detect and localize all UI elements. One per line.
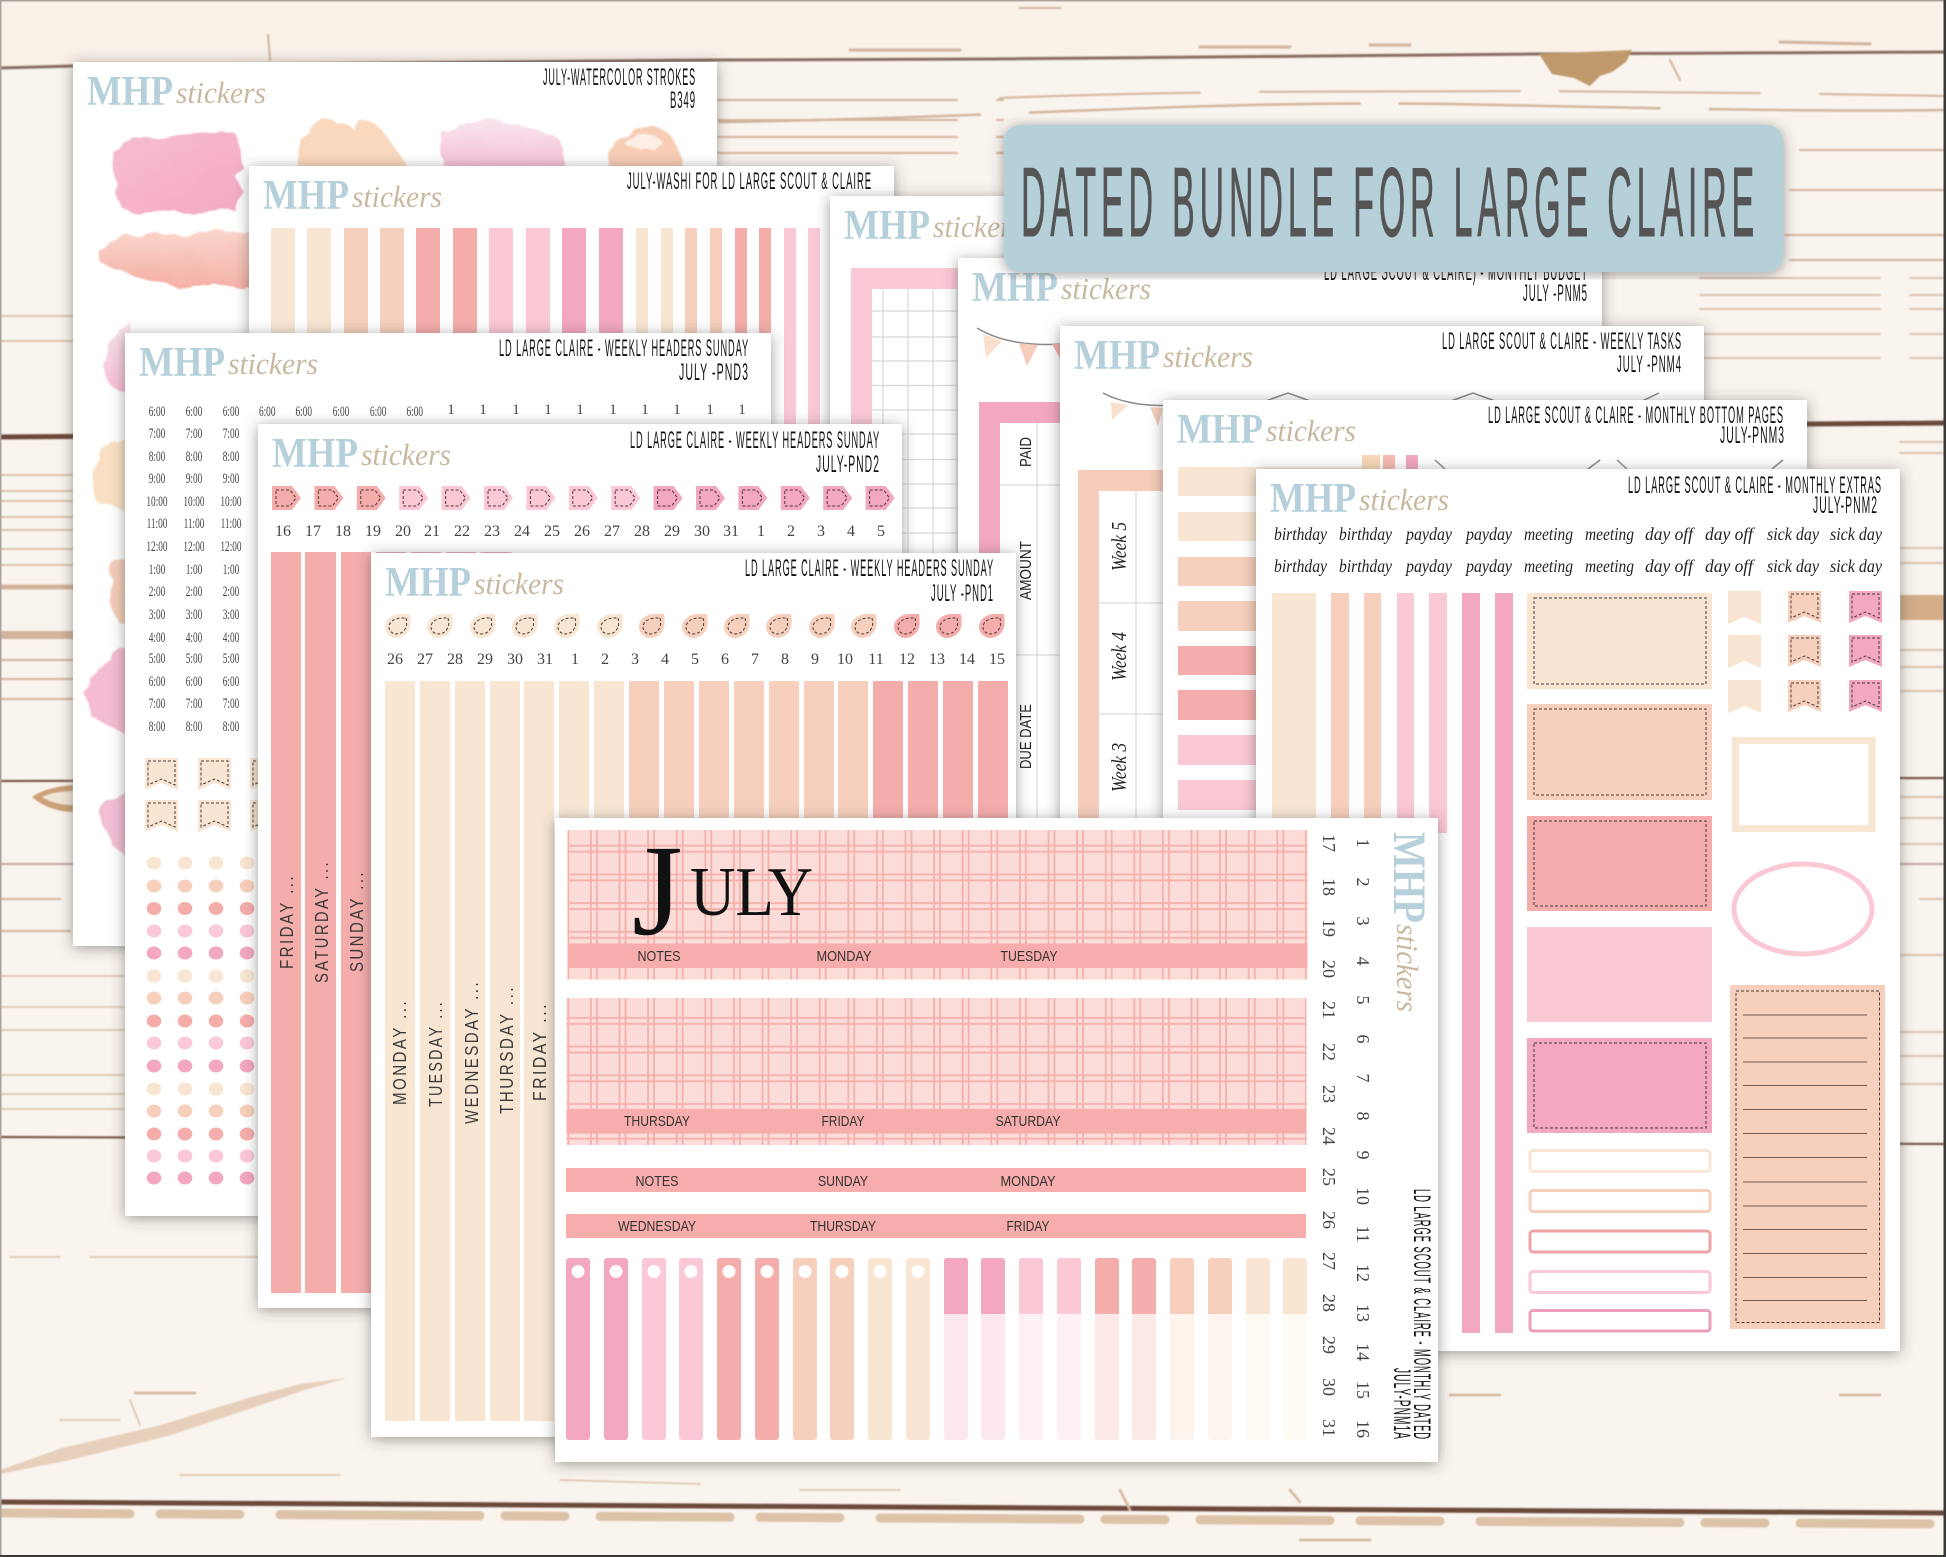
time labels: 1 (641, 402, 649, 418)
sheet title (1628, 472, 1882, 519)
date numbers: 17 (305, 523, 321, 540)
time labels: 8:00 (223, 448, 239, 465)
date numbers: 29 (664, 523, 680, 540)
time labels: 3:00 (149, 606, 165, 623)
sheet title (1442, 328, 1682, 378)
date numbers: 4 (847, 523, 855, 540)
sheet: monthly extras (1256, 469, 1900, 1351)
script words: birthday (1274, 524, 1327, 544)
time labels: 6:00 (149, 403, 165, 420)
text: LD LARGE CLAIRE - WEEKLY HEADERS SUNDAY (630, 427, 880, 454)
script words: day off (1705, 556, 1756, 576)
date numbers: 6 (721, 651, 729, 668)
vertical washi strips (1272, 593, 1513, 1333)
time labels: 12:00 (220, 538, 242, 555)
second plaid panel (566, 998, 1306, 1145)
coral header strips: SUNDAY ... (347, 870, 367, 972)
coral header strips (271, 552, 511, 1293)
time labels: 9:00 (223, 470, 239, 487)
date numbers: 5 (877, 523, 885, 540)
rotated date column 1-16 (1353, 838, 1373, 1438)
script words: birthday (1274, 556, 1327, 576)
time labels: 7:00 (186, 425, 202, 442)
date numbers: 21 (424, 523, 440, 540)
time labels: 7:00 (223, 695, 239, 712)
time labels: 12:00 (146, 538, 168, 555)
logo (272, 431, 451, 477)
date numbers: 20 (395, 523, 411, 540)
notes band (566, 1168, 1306, 1192)
date numbers: 2 (601, 651, 609, 668)
time labels: 1:00 (223, 561, 239, 578)
budget table: AMOUNT (1018, 541, 1035, 600)
text: LD LARGE CLAIRE - WEEKLY HEADERS SUNDAY (499, 335, 749, 362)
time labels: 7:00 (186, 695, 202, 712)
rotated date column 1-16: 15 (1353, 1381, 1373, 1399)
date numbers: 30 (507, 651, 523, 668)
oval frame (1734, 864, 1872, 954)
time labels: 2:00 (149, 583, 165, 600)
budget table (979, 402, 1200, 1142)
header strips: FRIDAY ... (530, 1002, 550, 1101)
rotated date column 1-16: 12 (1353, 1264, 1373, 1282)
date numbers: 31 (537, 651, 553, 668)
logo: MHP (844, 203, 930, 249)
rotated date column 1-16: 7 (1353, 1074, 1373, 1082)
time labels: 5:00 (186, 650, 202, 667)
time labels: 4:00 (186, 629, 202, 646)
sheet: monthly bottom pages (1163, 400, 1807, 1284)
logo (87, 69, 266, 115)
rotated sheet title (1388, 1189, 1435, 1440)
rotated logo (1383, 832, 1435, 1012)
script words: sick day (1767, 524, 1819, 544)
sheet: weekly headers PND2 (258, 424, 902, 1308)
time labels: 7:00 (149, 695, 165, 712)
date numbers: 2 (787, 523, 795, 540)
date numbers: 1 (757, 523, 765, 540)
script words: payday (1404, 524, 1452, 544)
time labels: 2:00 (223, 583, 239, 600)
time labels: 12:00 (183, 538, 205, 555)
date numbers: 22 (454, 523, 470, 540)
logo (263, 173, 442, 219)
script words: payday (1464, 524, 1512, 544)
date numbers: 7 (751, 651, 759, 668)
logo: stickers (1359, 482, 1449, 517)
time labels: 6:00 (149, 673, 165, 690)
rotated date column 1-16: 8 (1353, 1112, 1373, 1120)
sheet: washi (249, 166, 894, 1050)
time labels: 8:00 (186, 448, 202, 465)
script words: day off (1645, 556, 1696, 576)
rotated date column 17-31: 23 (1319, 1085, 1339, 1103)
tag stickers (272, 486, 895, 510)
rotated date column 17-31: 21 (1319, 1001, 1339, 1019)
watercolor swatches (84, 120, 682, 860)
sheet title (630, 427, 880, 478)
date numbers (387, 651, 1005, 668)
sheet: weekly tasks (1060, 326, 1704, 1210)
time labels: 8:00 (223, 718, 239, 735)
date numbers: 12 (899, 651, 915, 668)
time labels: 6:00 (370, 403, 386, 420)
header strips (385, 681, 1008, 1421)
rotated date column 1-16: 5 (1353, 996, 1373, 1004)
plaid panel with July title (568, 819, 1308, 980)
logo: stickers (361, 437, 451, 472)
week table (1078, 470, 1300, 1210)
time labels: 1 (609, 402, 617, 418)
script words: sick day (1830, 524, 1882, 544)
time labels: 8:00 (149, 718, 165, 735)
time labels: 6:00 (333, 403, 349, 420)
date numbers: 13 (929, 651, 945, 668)
logo: MHP (263, 173, 349, 219)
rotated date column 1-16: 4 (1353, 956, 1373, 966)
sheet: weekly headers PND3: JULY -PND3 (679, 359, 749, 386)
rotated date column 1-16: 9 (1353, 1150, 1373, 1160)
script words: meeting (1585, 556, 1634, 576)
time labels: 1 (479, 402, 487, 418)
date numbers: 28 (447, 651, 463, 668)
month title: J (632, 819, 683, 963)
sheet: weekly headers PND1 (371, 553, 1016, 1437)
date numbers: 29 (477, 651, 493, 668)
rotated date column 17-31: 18 (1319, 878, 1339, 896)
logo: MHP (972, 265, 1058, 311)
time labels (146, 402, 746, 735)
text: JULY -PNM5 (1523, 280, 1588, 307)
logo: stickers (1163, 339, 1253, 374)
sheet title (1324, 259, 1588, 307)
date numbers: 27 (604, 523, 620, 540)
date numbers: 28 (634, 523, 650, 540)
time labels: 3:00 (186, 606, 202, 623)
script words: meeting (1524, 524, 1573, 544)
date numbers: 23 (484, 523, 500, 540)
date numbers: 25 (544, 523, 560, 540)
budget table: DUE DATE (1018, 704, 1035, 769)
logo (1270, 476, 1449, 522)
rotated date column 1-16: 1 (1353, 838, 1373, 848)
time labels: 6:00 (223, 403, 239, 420)
date numbers: 18 (335, 523, 351, 540)
sheet title (745, 555, 994, 607)
header strips: TUESDAY ... (426, 1000, 446, 1107)
date numbers: 26 (387, 651, 403, 668)
second plaid panel: SATURDAY (996, 1113, 1060, 1130)
washi stripes (271, 228, 820, 1028)
sheet title (1488, 402, 1785, 449)
script words: meeting (1524, 556, 1573, 576)
time labels: 6:00 (407, 403, 423, 420)
date numbers: 9 (811, 651, 819, 668)
logo (972, 265, 1151, 311)
rotated logo: MHP (1383, 832, 1435, 923)
time labels: 10:00 (146, 493, 168, 510)
time labels: 1:00 (149, 561, 165, 578)
logo: MHP (272, 431, 358, 477)
rotated date column 1-16: 11 (1353, 1225, 1373, 1243)
date numbers: 11 (868, 651, 884, 668)
script words: day off (1705, 524, 1756, 544)
header strips: THURSDAY ... (497, 985, 517, 1114)
rotated date column 17-31: 19 (1319, 919, 1339, 937)
logo: stickers (1266, 413, 1356, 448)
time labels: 10:00 (183, 493, 205, 510)
slim outlined labels (1530, 1150, 1710, 1331)
sheet: monthly bottom pages: JULY-PNM3 (1720, 422, 1785, 449)
time labels: 8:00 (149, 448, 165, 465)
sheet: weekly headers PND1: JULY -PND1 (931, 580, 994, 607)
header strips: WEDNESDAY ... (462, 980, 482, 1124)
sheet: grid page (830, 196, 1474, 1080)
time labels: 6:00 (186, 403, 202, 420)
date numbers: 4 (661, 651, 669, 668)
script words: birthday (1339, 524, 1392, 544)
sheet: monthly dated PNM1A (555, 818, 1438, 1462)
time labels: 1 (512, 402, 520, 418)
weekday band: THURSDAY (810, 1218, 876, 1235)
time labels: 10:00 (220, 493, 242, 510)
logo: MHP (1270, 476, 1356, 522)
bunting (1103, 393, 1659, 426)
drop stickers (385, 614, 1005, 638)
coral header strips: FRIDAY ... (277, 874, 297, 969)
week table: Week 5 (1107, 522, 1131, 571)
second plaid panel: THURSDAY (624, 1113, 690, 1130)
box stickers (1527, 593, 1712, 1133)
weekday band: WEDNESDAY (618, 1218, 696, 1235)
flag stickers (1728, 591, 1882, 713)
date numbers: 27 (417, 651, 433, 668)
rotated date column 17-31: 22 (1319, 1043, 1339, 1061)
rotated date column 1-16: 3 (1353, 916, 1373, 926)
rotated date column 17-31: 20 (1319, 960, 1339, 978)
weekday band: FRIDAY (1006, 1218, 1050, 1235)
time labels: 7:00 (223, 425, 239, 442)
rotated date column 17-31: 27 (1319, 1252, 1339, 1270)
notes band: NOTES (636, 1173, 678, 1190)
date numbers: 15 (989, 651, 1005, 668)
script words: day off (1645, 524, 1696, 544)
lined notes panel (1730, 985, 1885, 1329)
script words: payday (1404, 556, 1452, 576)
logo (1074, 333, 1253, 379)
time labels: 2:00 (186, 583, 202, 600)
sheet title (543, 64, 696, 114)
sheet: watercolor strokes (73, 62, 717, 946)
date numbers: 1 (571, 651, 579, 668)
sheet: weekly headers PND2: JULY-PND2 (816, 451, 880, 478)
sheet: monthly budget (958, 258, 1602, 1142)
rotated date column 17-31: 29 (1319, 1336, 1339, 1354)
logo: MHP (87, 69, 173, 115)
time labels: 1 (576, 402, 584, 418)
script words: birthday (1339, 556, 1392, 576)
rotated date column 1-16: 14 (1353, 1343, 1373, 1361)
date numbers: 30 (694, 523, 710, 540)
logo (844, 203, 1023, 249)
rotated date column 17-31 (1319, 834, 1339, 1437)
date numbers: 14 (959, 651, 975, 668)
time labels: 4:00 (223, 629, 239, 646)
rotated date column 1-16: 2 (1353, 878, 1373, 886)
date numbers: 3 (631, 651, 639, 668)
date numbers: 3 (817, 523, 825, 540)
time labels: 11:00 (221, 515, 241, 532)
script words: sick day (1767, 556, 1819, 576)
date numbers: 5 (691, 651, 699, 668)
sheet title (499, 335, 749, 386)
time labels: 4:00 (149, 629, 165, 646)
time labels: 1 (447, 402, 455, 418)
tab strips (566, 1258, 1307, 1440)
month title (632, 819, 813, 963)
logo: stickers (933, 209, 1023, 244)
script words (1274, 524, 1882, 576)
rotated date column 17-31: 25 (1319, 1168, 1339, 1186)
time labels: 5:00 (223, 650, 239, 667)
logo: MHP (1177, 407, 1263, 453)
time labels: 1 (706, 402, 714, 418)
text: JULY-WASHI FOR LD LARGE SCOUT & CLAIRE (627, 168, 872, 195)
rotated date column 17-31: 24 (1319, 1127, 1339, 1145)
script words: meeting (1585, 524, 1634, 544)
logo: stickers (1061, 271, 1151, 306)
time labels: 7:00 (149, 425, 165, 442)
rotated date column 1-16: 16 (1353, 1420, 1373, 1438)
logo: MHP (385, 560, 471, 606)
time labels: 1:00 (186, 561, 202, 578)
notes band: SUNDAY (818, 1173, 868, 1190)
date numbers (275, 523, 885, 540)
date numbers: 24 (514, 523, 530, 540)
date numbers: 26 (574, 523, 590, 540)
date numbers: 10 (837, 651, 853, 668)
pink grid frame (851, 268, 1200, 1080)
rotated date column 1-16: 10 (1353, 1187, 1373, 1205)
rotated date column 17-31: 26 (1319, 1211, 1339, 1229)
dot stickers (147, 856, 254, 1184)
logo: stickers (176, 75, 266, 110)
script words: sick day (1830, 556, 1882, 576)
rectangle frame (1736, 740, 1872, 828)
month title: ULY (690, 854, 813, 931)
budget table: PAID (1018, 437, 1035, 467)
time labels: 5:00 (149, 650, 165, 667)
flag stickers (145, 758, 283, 832)
week table: Week 4 (1107, 632, 1131, 681)
time labels: 1 (544, 402, 552, 418)
time labels: 6:00 (186, 673, 202, 690)
sheet: weekly tasks: JULY -PNM4 (1617, 351, 1682, 378)
coral header strips: SATURDAY ... (312, 860, 332, 983)
logo: stickers (228, 346, 318, 381)
date numbers: 8 (781, 651, 789, 668)
rotated date column 17-31: 30 (1319, 1378, 1339, 1396)
sheet: monthly dated PNM1A: JULY-PNM1A (1388, 1368, 1415, 1440)
time labels: 8:00 (186, 718, 202, 735)
time labels: 3:00 (223, 606, 239, 623)
time labels: 1 (738, 402, 746, 418)
time labels: 1 (673, 402, 681, 418)
script words: payday (1464, 556, 1512, 576)
title banner (1004, 125, 1783, 272)
date numbers: 19 (365, 523, 381, 540)
time labels: 11:00 (184, 515, 204, 532)
time labels: 9:00 (149, 470, 165, 487)
date numbers: 31 (723, 523, 739, 540)
logo: stickers (352, 179, 442, 214)
text: LD LARGE CLAIRE - WEEKLY HEADERS SUNDAY (745, 555, 994, 582)
horizontal stripes (1178, 455, 1783, 810)
logo (385, 560, 564, 606)
rotated date column 1-16: 6 (1353, 1034, 1373, 1044)
time labels: 6:00 (223, 673, 239, 690)
rotated date column 17-31: 31 (1319, 1419, 1339, 1437)
logo: MHP (139, 340, 225, 386)
second plaid panel: FRIDAY (822, 1113, 864, 1130)
sheet: weekly headers PND3 (125, 333, 771, 1216)
rotated date column 17-31: 28 (1319, 1294, 1339, 1312)
sheet: watercolor strokes: B349 (670, 87, 696, 114)
time labels: 6:00 (259, 403, 275, 420)
time labels: 11:00 (147, 515, 167, 532)
time labels: 9:00 (186, 470, 202, 487)
logo (1177, 407, 1356, 453)
plaid panel with July title: MONDAY (816, 948, 872, 965)
plaid panel with July title: NOTES (638, 948, 680, 965)
week table: Week 3 (1107, 743, 1131, 792)
rotated logo: stickers (1390, 924, 1425, 1012)
logo (139, 340, 318, 386)
date numbers: 16 (275, 523, 291, 540)
header strips: MONDAY ... (390, 999, 410, 1105)
rotated date column 1-16: 13 (1353, 1304, 1373, 1322)
rotated date column 17-31: 17 (1319, 834, 1339, 852)
time labels: 6:00 (296, 403, 312, 420)
logo: stickers (474, 566, 564, 601)
weekday band (566, 1214, 1306, 1238)
text: JULY-WATERCOLOR STROKES (543, 64, 696, 91)
bunting (977, 328, 1062, 366)
plaid panel with July title: TUESDAY (1000, 948, 1058, 965)
notes band: MONDAY (1000, 1173, 1056, 1190)
logo: MHP (1074, 333, 1160, 379)
